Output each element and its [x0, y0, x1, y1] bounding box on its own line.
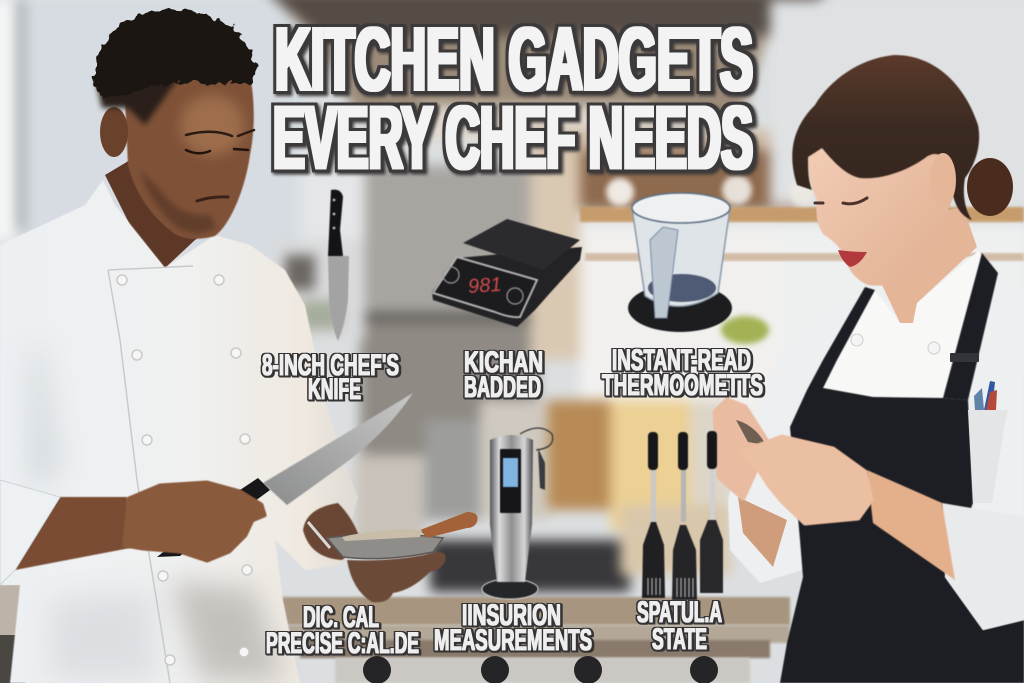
wooden handle — [420, 512, 478, 538]
label: digital precise: DIC. CAL — [303, 601, 379, 634]
woman's sleeve cuff — [942, 503, 1024, 630]
button right — [507, 288, 523, 304]
label: insurion measurements: MEASUREMENTS — [434, 624, 592, 657]
man's ear — [100, 107, 128, 157]
coat seam — [108, 266, 193, 683]
woman's right hand — [742, 437, 871, 523]
spatula three — [700, 431, 723, 593]
woman's hair bun — [967, 158, 1013, 216]
spoon — [342, 530, 422, 541]
blade — [263, 393, 413, 505]
label: instant-read thermometer: INSTANT-READ — [612, 344, 751, 377]
spout — [650, 227, 678, 318]
wrist band — [308, 522, 330, 548]
woman's collar — [823, 250, 980, 398]
jar contents — [648, 274, 716, 302]
wrist — [303, 503, 362, 560]
chef woman — [715, 55, 1024, 683]
woman's features — [815, 198, 867, 204]
label: instant-read thermometer — [602, 344, 763, 402]
man's face highlight — [180, 95, 244, 155]
gadget: digital thermometer — [482, 428, 553, 599]
woman's right forearm — [867, 470, 955, 580]
plate — [327, 534, 443, 559]
spatula two — [672, 432, 697, 600]
label: digital precise — [266, 601, 419, 660]
apron — [780, 253, 1024, 683]
chef man — [0, 10, 358, 683]
base — [628, 284, 732, 332]
woman's hair — [792, 55, 979, 220]
steel body — [490, 435, 533, 582]
man's facial features — [186, 130, 254, 201]
rivets — [333, 199, 335, 229]
gadget: chef's knife — [328, 190, 349, 341]
label: spatula state — [637, 596, 722, 656]
label: spatula state: STATE — [652, 623, 707, 656]
label: digital precise: PRECISE C:AL.DE — [266, 627, 419, 660]
woman's neck — [882, 207, 977, 323]
woman's mouth — [838, 250, 867, 267]
gadget: spatulas — [642, 431, 723, 600]
man's stubble — [140, 170, 216, 233]
coat fold shading — [30, 340, 285, 680]
man's head — [125, 76, 254, 239]
man's knife hand — [125, 483, 264, 560]
woman's ear — [930, 153, 956, 207]
handle — [157, 478, 270, 557]
man's plate hand — [303, 503, 478, 602]
fingers — [347, 552, 446, 602]
label: instant-read thermometer: THERMOOMETTS — [602, 369, 763, 402]
woman's left forearm — [738, 497, 787, 567]
coat buttons on woman — [851, 334, 940, 354]
gadget: blender jar — [628, 193, 732, 332]
rim — [632, 193, 730, 223]
label: kitchan badded: KICHAN — [464, 346, 543, 379]
gadget: kitchen scale — [432, 219, 582, 327]
woman's left hand — [715, 400, 768, 498]
strap buckle — [950, 353, 979, 362]
lcd — [503, 458, 518, 487]
base — [482, 579, 538, 599]
man's neck — [105, 160, 215, 268]
base — [432, 247, 582, 327]
woman's head — [807, 120, 955, 286]
blade — [328, 256, 349, 341]
body panel — [433, 257, 537, 317]
label: spatula state: SPATUL.A — [637, 596, 722, 629]
label: chef's knife — [262, 349, 399, 406]
title — [273, 10, 753, 188]
jar — [632, 208, 730, 306]
label: insurion measurements: IINSURION — [462, 599, 561, 632]
probe — [538, 448, 545, 490]
woman's coat — [728, 253, 1024, 620]
label: insurion measurements — [434, 599, 592, 657]
top plate — [463, 219, 580, 270]
large knife held by man — [157, 393, 413, 557]
label: chef's knife: KNIFE — [308, 373, 361, 406]
handle — [328, 190, 343, 256]
coat pocket and pens — [968, 381, 1008, 503]
man's forearm — [15, 497, 130, 570]
label: chef's knife: 8-INCH CHEF'S — [262, 349, 399, 382]
small object in hand — [736, 420, 766, 445]
man's hair — [93, 10, 255, 98]
label: kitchan badded — [464, 346, 543, 404]
cord — [520, 428, 553, 450]
button left — [443, 267, 459, 283]
man's sleeve cuff — [0, 480, 60, 585]
label: kitchan badded: BADDED — [464, 371, 541, 404]
coat buttons — [117, 275, 252, 665]
spatula one — [642, 432, 665, 598]
screen panel — [500, 449, 521, 513]
man's fade hairline — [96, 76, 180, 125]
display reading: 981 — [467, 274, 502, 298]
man's coat — [0, 180, 358, 683]
